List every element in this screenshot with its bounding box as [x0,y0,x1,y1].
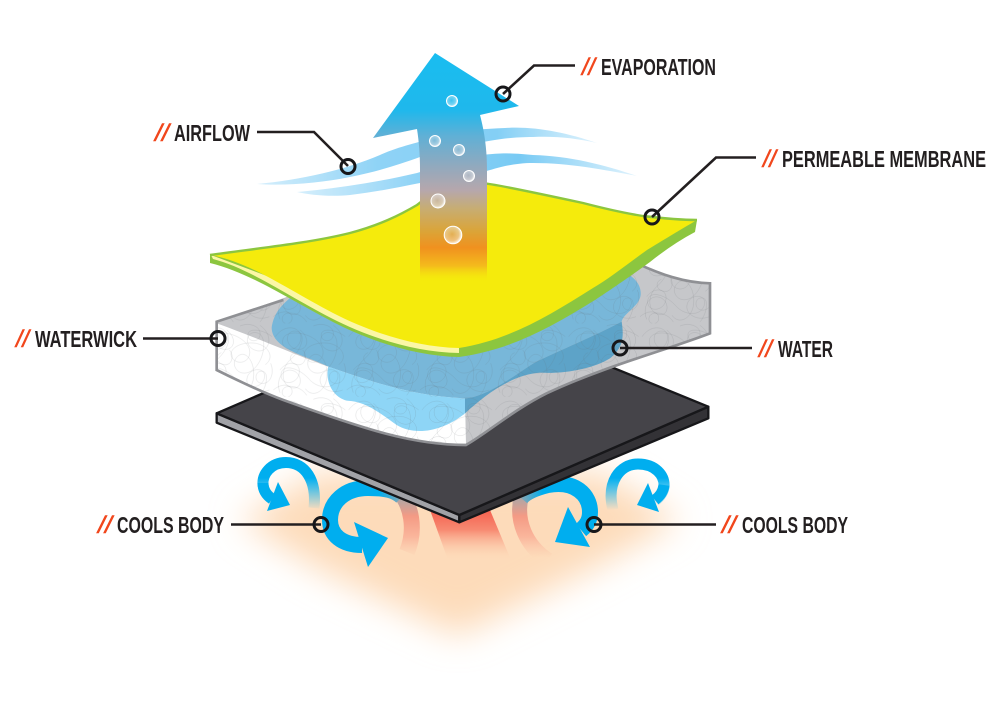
icon: small circular arrow left [263,462,314,511]
label: cools body right: // [720,512,738,539]
label: water [613,336,833,363]
membrane top [210,182,697,348]
airflow streams [257,128,637,196]
label: waterwick [14,326,225,353]
water on shaded face [465,322,623,413]
membrane top outline [210,182,697,255]
water on top surface [272,267,641,398]
label: cools body left: // [96,512,114,539]
permeable membrane layer [210,182,697,357]
evaporation arrow [373,53,519,282]
label: waterwick: // [14,326,31,353]
icon: large circular arrow right [521,484,590,547]
wick white face [217,323,466,445]
heat tail right [520,498,548,560]
label: airflow: // [153,120,171,147]
label: cools body right [587,512,848,539]
label: waterwick: WATERWICK [35,326,137,352]
label: evaporation [496,54,716,101]
wick body [217,263,710,445]
membrane green edge [210,220,697,357]
label: water: WATER [778,336,833,362]
heat tail left [398,490,412,552]
label: permeable membrane [645,146,986,224]
icon: small circular arrow right [611,464,664,512]
icon: large circular arrow left [330,488,402,567]
membrane cream edge [211,255,459,353]
label: water: // [757,336,774,363]
fibre texture [218,270,708,444]
water on white face [327,367,465,431]
label: evaporation: // [580,54,597,81]
label: permeable membrane: // [761,146,778,173]
label: cools body right: COOLS BODY [742,512,848,538]
heat glow from body [240,472,680,636]
label: cools body left: COOLS BODY [117,512,224,538]
label: cools body left [96,512,328,539]
waterwick layer [215,266,712,446]
water bubbles [430,96,474,244]
red heat core [430,510,511,560]
label: airflow: AIRFLOW [174,120,250,146]
label: evaporation: EVAPORATION [601,54,716,80]
wick outline [217,263,710,445]
base layer: dark plate [217,307,708,522]
label: airflow [153,120,355,174]
